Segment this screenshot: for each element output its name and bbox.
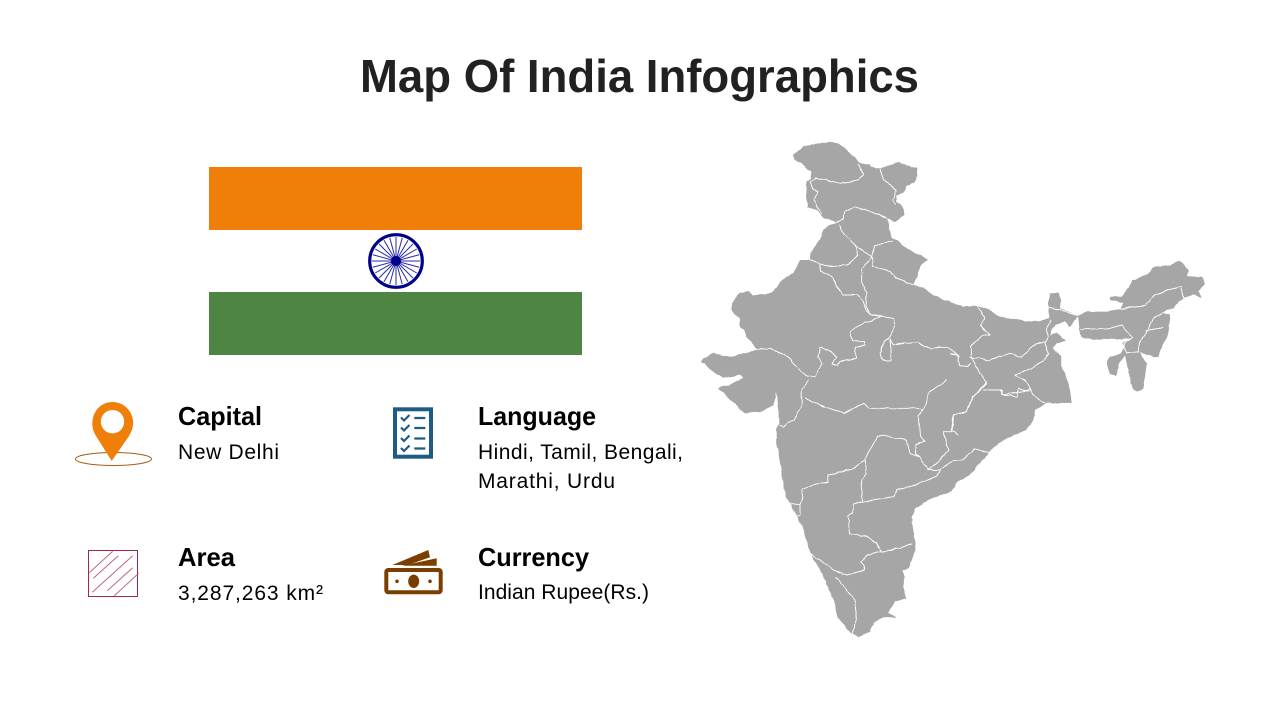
state borders: north [757, 165, 960, 377]
language text block: Language [478, 401, 596, 431]
icon: banknotes [386, 550, 441, 592]
area text block: Area [178, 542, 236, 572]
currency text block [478, 542, 649, 604]
icon: checklist [395, 409, 431, 457]
state borders: east and north-east [950, 286, 1183, 435]
map of India [701, 142, 1205, 637]
flag of India [209, 167, 582, 355]
title: Map Of India Infographics [360, 50, 919, 102]
currency text block: Currency [478, 542, 590, 572]
language text block [478, 401, 683, 493]
capital text block: Capital [178, 401, 262, 431]
currency text block: Indian Rupee(Rs.) [478, 581, 649, 604]
language text block: Hindi, Tamil, Bengali, [478, 441, 683, 464]
area text block [178, 542, 323, 605]
icon: Ashoka Chakra wheel [370, 235, 422, 287]
area text block: 3,287,263 km² [178, 582, 323, 605]
icon: area square [88, 550, 139, 596]
language text block: Marathi, Urdu [478, 470, 615, 493]
capital text block [178, 401, 279, 464]
state borders: centre and south [780, 380, 1030, 633]
capital text block: New Delhi [178, 441, 279, 464]
icon: location pin [76, 402, 152, 466]
